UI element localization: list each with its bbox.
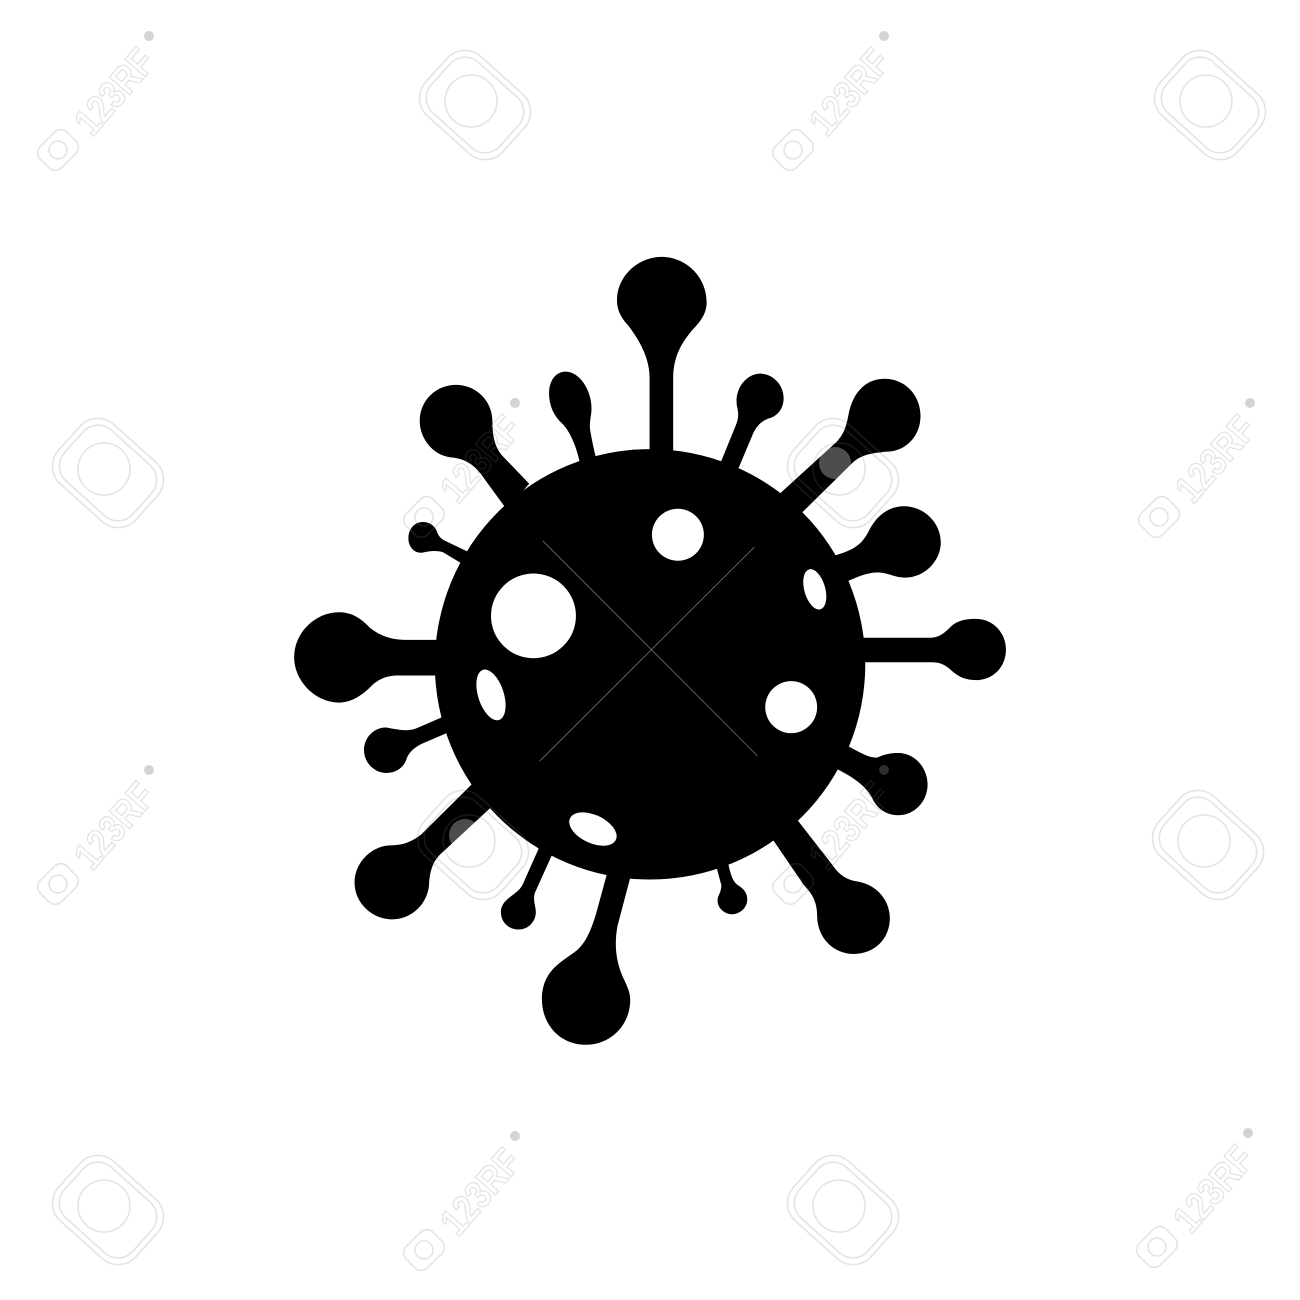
- spike: right lower: [835, 745, 928, 815]
- spike: top: [617, 257, 707, 457]
- watermark: 123RF row 1 right: 123RF: [801, 41, 899, 144]
- body holes: [471, 509, 831, 852]
- watermark: 123RF row 4 left: [400, 1131, 530, 1274]
- watermark: 123RF row 3 right: [769, 765, 899, 908]
- watermark: 123RF row 3 left: [34, 765, 164, 908]
- watermark: 123RF row 1 left: 123RF: [66, 41, 164, 144]
- spike: upper right large: [776, 379, 921, 515]
- watermark: 123RF row 1 right: [769, 31, 899, 174]
- hairline cross: [540, 541, 758, 761]
- watermark: 123RF row 2 right: [1135, 398, 1265, 541]
- spike: bottom left small: [501, 844, 554, 930]
- spike: bottom right small: [715, 860, 747, 914]
- virus silhouette: [294, 257, 1006, 1045]
- watermark: 123RF row 4 right: 123RF: [1165, 1138, 1263, 1241]
- spike: left large: [294, 612, 440, 703]
- watermark: 123RF row 2 left: [400, 398, 530, 541]
- watermark: 123RF row 3 left: 123RF: [66, 775, 164, 878]
- spike: lower left large: [355, 782, 493, 919]
- watermark: 123RF row 2 left: 123RF: [432, 408, 530, 511]
- spike: right: [858, 619, 1006, 680]
- spike: upper left large: [420, 385, 529, 509]
- watermark: 123RF row 3 right: 123RF: [801, 775, 899, 878]
- spike: top right small: [720, 374, 784, 472]
- virus body: [435, 449, 865, 880]
- spike: bottom large: [542, 870, 632, 1045]
- spike: lower right large: [771, 816, 890, 954]
- spike: right upper: [832, 506, 941, 582]
- spike: top left small: [549, 372, 596, 464]
- watermark: 123RF row 2 right: 123RF: [1167, 408, 1265, 511]
- watermark: 123RF row 4 right: [1133, 1128, 1263, 1271]
- spike: left lower small: [364, 717, 449, 773]
- spike: left upper tiny: [408, 522, 469, 564]
- watermark: 123RF row 4 left: 123RF: [432, 1141, 530, 1244]
- watermark: 123RF row 1 left: [34, 31, 164, 174]
